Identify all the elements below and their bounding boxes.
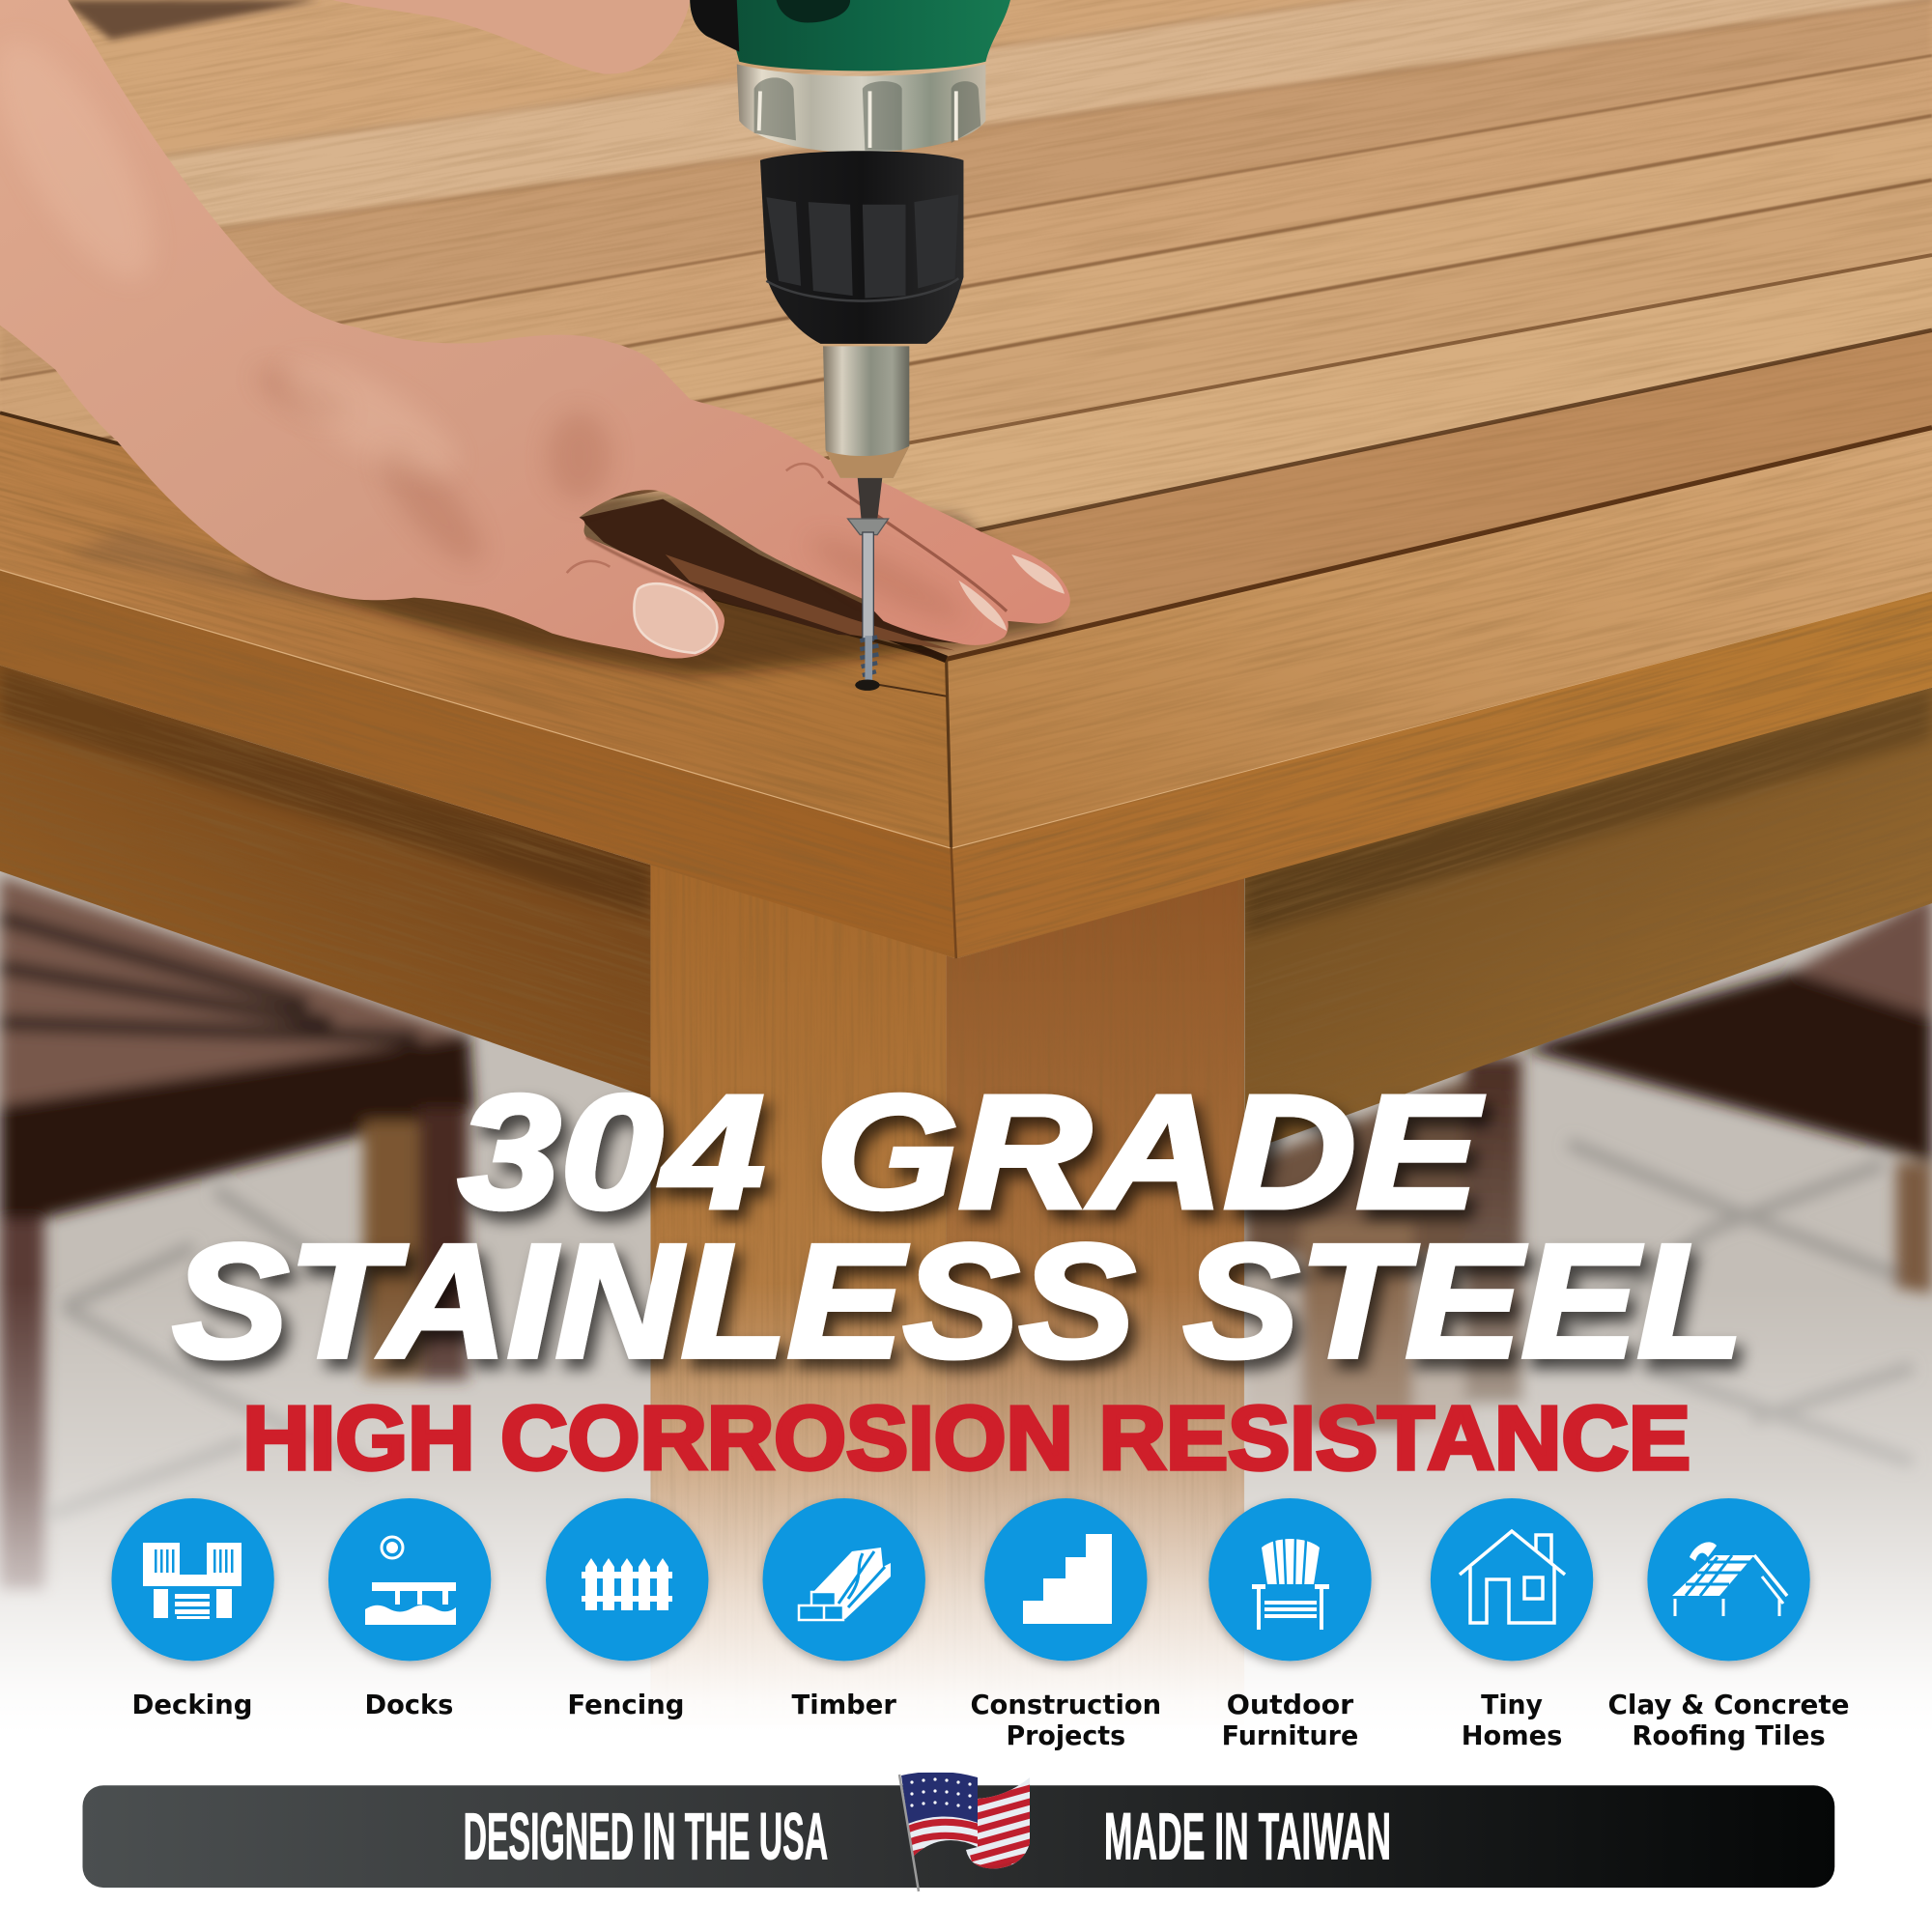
drill body	[690, 0, 1010, 71]
title: STAINLESS STEEL	[173, 1211, 1744, 1391]
finger separation	[828, 482, 1007, 611]
circle: Tiny Homes: Homes	[1462, 1721, 1562, 1751]
hand shading	[250, 357, 972, 634]
circle: Clay & Concrete Roofing Tiles: Clay & Concrete	[1608, 1690, 1850, 1720]
hand holding the wood	[0, 0, 1070, 675]
black chuck	[760, 151, 963, 344]
metal collar	[737, 64, 985, 153]
table leg	[650, 863, 1244, 1725]
shadow between thumb and finger	[579, 499, 958, 643]
circle: Docks: Docks	[365, 1690, 453, 1720]
table apron and front edge	[0, 570, 1932, 1143]
circle: Construction Projects: Projects	[1006, 1721, 1125, 1751]
circle: Fencing: Fencing	[567, 1690, 685, 1720]
circle: Decking: Decking	[131, 1690, 252, 1720]
circle: Outdoor Furniture	[1208, 1498, 1372, 1751]
finger nails	[1011, 554, 1065, 594]
drill	[690, 0, 1010, 691]
icon row	[111, 1498, 1850, 1751]
circle: Tiny Homes: Tiny	[1481, 1690, 1543, 1720]
subtitle: HIGH CORROSION RESISTANCE	[242, 1387, 1690, 1488]
circle: Fencing	[546, 1498, 708, 1720]
hand shadow on the wood	[246, 493, 1060, 675]
screw	[848, 519, 889, 691]
circle: Timber	[763, 1498, 925, 1720]
banner text: made in Taiwan: MADE IN TAIWAN	[1104, 1800, 1391, 1874]
upper hand gripping the drill	[332, 0, 690, 74]
circle: Clay & Concrete Roofing Tiles	[1608, 1498, 1850, 1751]
circle: Decking	[111, 1498, 274, 1720]
circle: Outdoor Furniture: Furniture	[1222, 1721, 1358, 1751]
circle: Clay & Concrete Roofing Tiles: Roofing Tiles	[1632, 1721, 1826, 1751]
metal shaft	[823, 346, 909, 478]
circle: Outdoor Furniture: Outdoor	[1227, 1690, 1354, 1720]
fade to white	[0, 1282, 1932, 1737]
icon: American flag	[898, 1772, 1030, 1891]
bottom banner: DESIGNED IN THE USA	[464, 1800, 828, 1874]
title: 304 GRADE	[458, 1063, 1484, 1242]
table top surface with slats	[0, 0, 1932, 848]
bottom banner	[82, 1763, 1834, 1891]
circle: Construction Projects: Construction	[970, 1690, 1161, 1720]
thumb nail	[634, 583, 717, 653]
title	[173, 1063, 1744, 1391]
driver bit	[858, 478, 882, 520]
circle: Tiny Homes	[1431, 1498, 1593, 1751]
circle: Docks	[328, 1498, 491, 1720]
circle: Construction Projects	[970, 1498, 1161, 1751]
circle: Timber: Timber	[792, 1690, 896, 1720]
